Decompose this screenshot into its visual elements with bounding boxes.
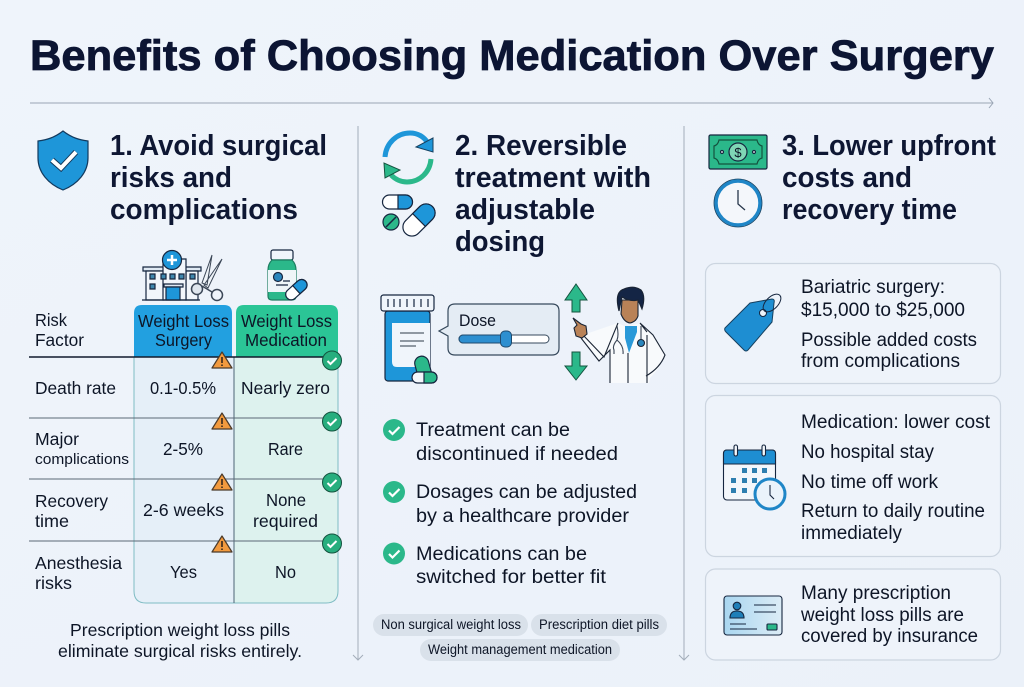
row: death rate (35, 378, 330, 398)
card: medication cost: Medication: lower cost (801, 412, 991, 433)
row: recovery time (35, 490, 318, 531)
checklist (383, 419, 637, 588)
row: recovery time: Recovery (35, 491, 108, 511)
title: Benefits of Choosing Medication Over Surgery (30, 32, 994, 80)
row: recovery time: 2-6 weeks (143, 500, 224, 520)
heading 1: 1. Avoid surgical (110, 130, 327, 162)
table header: surgery (134, 305, 232, 357)
check item 1 (383, 419, 618, 465)
heading 1 (110, 130, 327, 226)
table body: surgery column (134, 357, 234, 603)
check item 2 (383, 481, 637, 527)
arrow: dose up (565, 284, 587, 312)
table body: medication column (234, 357, 338, 603)
check item 3: switched for better fit (416, 567, 607, 588)
check item 2: Dosages can be adjusted (416, 482, 637, 503)
heading 2: dosing (455, 226, 545, 258)
keyword chip: non surgical: Non surgical weight loss (381, 617, 521, 632)
panel: reversible treatment (373, 130, 667, 661)
heading 3: costs and (782, 162, 912, 194)
row: recovery time: None (266, 490, 306, 510)
keyword chip: weight management: Weight management medication (428, 642, 612, 657)
icon: hospital and scissors (142, 250, 222, 300)
row: anesthesia risks: No (275, 562, 296, 582)
row: anesthesia risks: Anesthesia (35, 553, 122, 573)
icon: medicine bottle (268, 250, 309, 302)
check item 3: Medications can be (416, 544, 587, 565)
arrow: dose down (565, 352, 587, 380)
table caption (58, 620, 302, 661)
card: medication cost (706, 396, 1000, 556)
icons: green checks (322, 351, 342, 553)
row: major complications: 2-5% (163, 439, 203, 459)
card: surgery cost: $15,000 to $25,000 (801, 300, 965, 321)
row: major complications (35, 429, 303, 468)
row: death rate: Nearly zero (241, 378, 330, 398)
row: major complications: Major (35, 429, 79, 449)
panel: avoid surgical risks (29, 130, 342, 661)
card: medication cost: No hospital stay (801, 442, 934, 463)
table outline and grid (29, 357, 338, 603)
icon: prescription bottle (381, 295, 437, 383)
row: anesthesia risks: Yes (170, 562, 197, 582)
arrow: title rule (30, 98, 993, 108)
heading 2 (455, 130, 651, 258)
keyword chip: prescription diet pills: Prescription diet pills (539, 617, 659, 632)
table header: medication (236, 305, 338, 357)
check item 1: Treatment can be (416, 420, 570, 441)
card: medication cost: immediately (801, 523, 902, 544)
dose slider callout (439, 304, 559, 355)
heading 1: risks and (110, 162, 232, 194)
column labels: Factor (35, 330, 84, 350)
card: surgery cost (706, 264, 1000, 384)
column labels: Weight Loss (241, 311, 332, 331)
row: anesthesia risks (35, 553, 296, 593)
panel: lower costs (706, 130, 1000, 660)
heading 2: adjustable (455, 194, 595, 226)
card: surgery cost: Bariatric surgery: (801, 277, 945, 298)
icon: pills (382, 195, 439, 240)
card: medication cost: Return to daily routine (801, 501, 985, 522)
column labels: Surgery (155, 330, 212, 350)
icon: clock (714, 179, 762, 227)
check item 1: discontinued if needed (416, 444, 618, 465)
row: major complications: Rare (268, 439, 303, 459)
card: insurance: Many prescription (801, 583, 951, 604)
icon: banknote: $ (734, 145, 742, 160)
card: insurance (706, 569, 1000, 660)
icon: price tag (725, 291, 784, 351)
card: insurance: covered by insurance (801, 626, 978, 647)
row: anesthesia risks: risks (35, 573, 72, 593)
keyword chip: non surgical (373, 614, 528, 636)
column labels: Risk (35, 310, 67, 330)
column labels: Weight Loss (138, 311, 229, 331)
column labels (35, 310, 332, 350)
card: insurance: weight loss pills are (800, 605, 964, 626)
table caption: Prescription weight loss pills (70, 620, 290, 640)
arrow: column divider 2 (679, 126, 689, 660)
arrow: column divider 1 (353, 126, 363, 660)
row: recovery time: time (35, 511, 69, 531)
heading 3 (782, 130, 996, 226)
check item 3 (383, 542, 607, 588)
icon: shield (38, 131, 88, 190)
table caption: eliminate surgical risks entirely. (58, 641, 302, 661)
heading 1: complications (110, 194, 298, 226)
icon: doctor (573, 287, 665, 383)
heading 2: treatment with (455, 162, 651, 194)
row: major complications: complications (35, 451, 129, 468)
heading 3: recovery time (782, 194, 957, 226)
icon: cycle arrows (384, 133, 433, 182)
dose slider callout: Dose (459, 312, 496, 330)
row: death rate: 0.1-0.5% (150, 378, 216, 398)
card: surgery cost: from complications (801, 351, 960, 372)
icon: calendar and clock (724, 445, 785, 509)
row: recovery time: required (253, 511, 318, 531)
card: medication cost: No time off work (801, 472, 938, 493)
comparison table (29, 305, 342, 603)
keyword chip: weight management (420, 639, 620, 661)
keyword chip: prescription diet pills (531, 614, 667, 636)
icons: warning triangles (212, 352, 232, 552)
heading 3: 3. Lower upfront (782, 130, 996, 162)
check item 2: by a healthcare provider (416, 506, 630, 527)
icon: banknote (709, 135, 767, 169)
icon: insurance card (724, 596, 782, 635)
card: surgery cost: Possible added costs (801, 330, 977, 351)
heading 2: 2. Reversible (455, 130, 627, 162)
row: death rate: Death rate (35, 378, 116, 398)
column labels: Medication (245, 330, 327, 350)
